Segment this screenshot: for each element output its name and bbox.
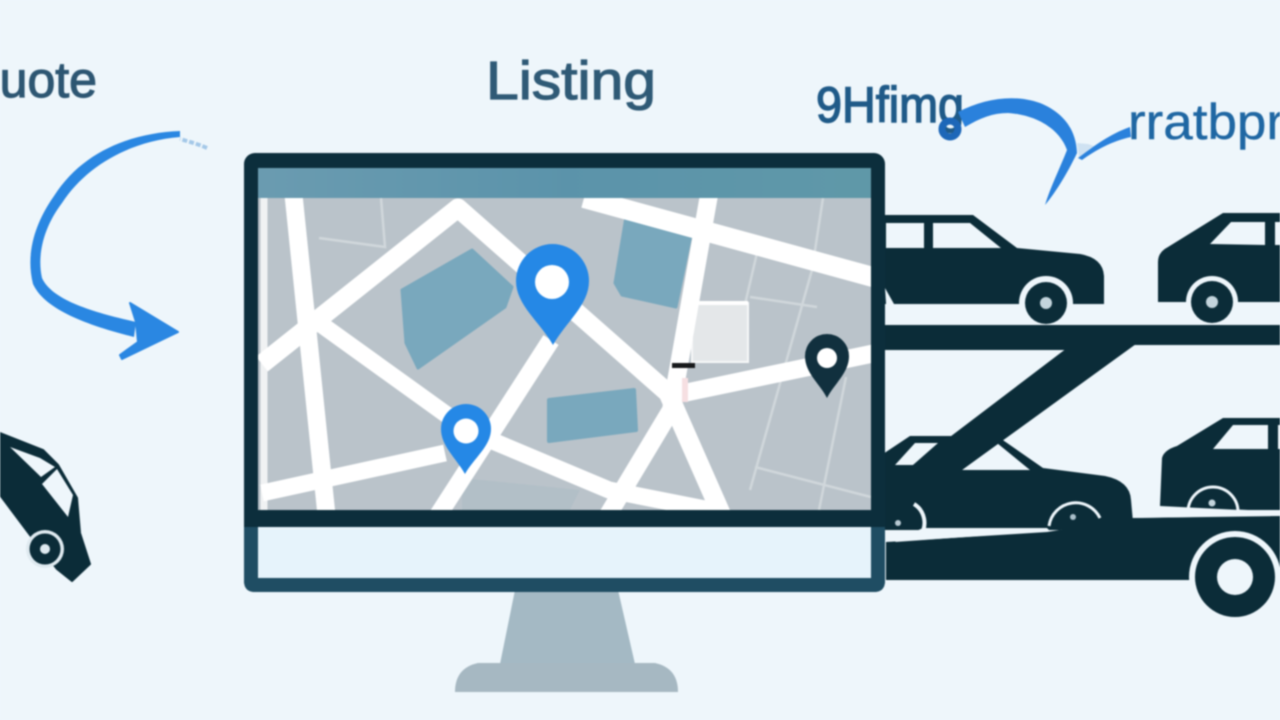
upper deck bar [880,325,1280,350]
render artefact [672,363,695,368]
building: centre block [549,390,636,441]
car: lower deck, right [1133,418,1280,517]
car: lower deck, left [880,436,1133,542]
lower frame teal tint [244,527,885,592]
car: upper deck, left [870,215,1104,330]
pale plaza block [692,303,748,362]
monitor [244,153,885,592]
monitor chin panel [258,527,871,578]
monitor frame [244,153,885,592]
map pin: large blue [516,244,589,345]
arrow: quote to listing [30,131,207,359]
faint side streets [319,198,871,510]
heading: Shipping (garbled): 9Hfimg [816,77,964,133]
map pin: small blue [441,404,491,474]
heading: Listing: Listing [486,51,656,111]
curved blue arrows on right [942,98,1131,205]
building: faint lower block [462,478,580,510]
monitor stand [455,590,678,692]
pink smudge [682,378,688,402]
building: upper right block [615,217,691,307]
car: upper deck, right [1158,213,1280,328]
car carrier truck [870,213,1280,623]
road network [262,190,880,520]
map [258,190,880,520]
truck bed [886,516,1280,580]
truck rear wheel [1189,531,1280,623]
icon: car at left edge [0,433,90,581]
upper deck wheels [1025,281,1233,324]
diagonal support strut [913,344,1136,470]
heading: Transport (garbled, cut off): rratbpr [1128,94,1280,150]
screen header bar [258,168,871,198]
building: left block [402,250,512,368]
map pin: dark [805,334,849,398]
